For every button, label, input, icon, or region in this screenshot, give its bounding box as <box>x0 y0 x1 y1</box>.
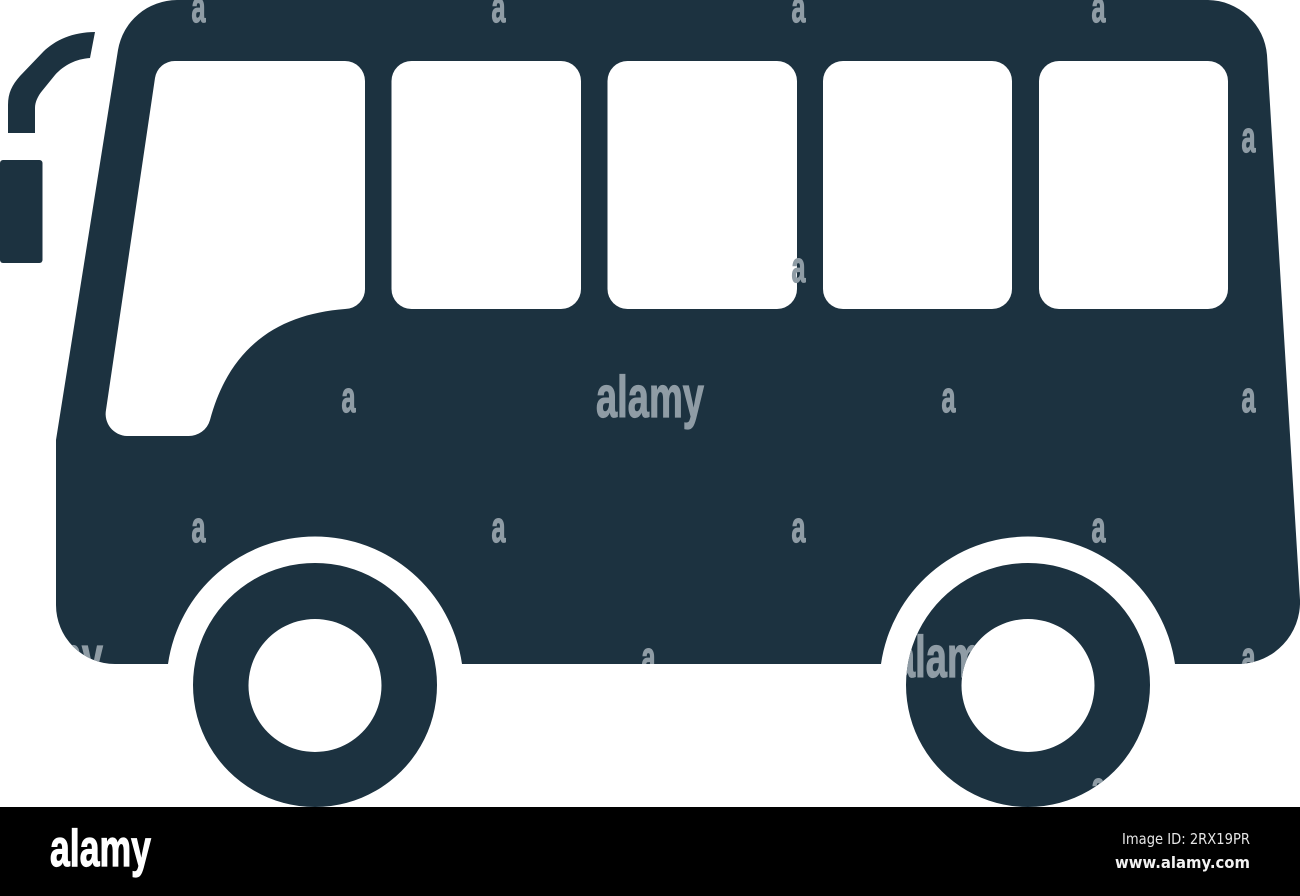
small repeating marks: a <box>1092 763 1106 812</box>
small repeating marks: a <box>1242 633 1256 682</box>
footer logo: alamy <box>50 820 151 878</box>
side windows <box>392 61 1228 309</box>
central watermark: alamy <box>596 365 704 430</box>
lower watermarks <box>72 634 975 678</box>
small repeating marks: a <box>792 243 806 292</box>
small repeating marks: a <box>942 373 956 422</box>
small repeating marks: a <box>1242 373 1256 422</box>
website: www.alamy.com <box>1115 853 1250 872</box>
mirror <box>0 160 42 263</box>
rear wheel <box>906 563 1150 807</box>
small repeating marks: a <box>342 373 356 422</box>
small repeating marks: a <box>792 503 806 552</box>
small repeating marks: a <box>1092 503 1106 552</box>
bus body with windshield cut-out <box>56 0 1300 664</box>
footer bar <box>0 807 1300 896</box>
image id: Image ID: 2RX19PR <box>1122 830 1250 848</box>
small repeating marks: a <box>642 633 656 682</box>
lower watermarks: alamy <box>894 625 1002 690</box>
front wheel <box>193 563 437 807</box>
small repeating marks: a <box>1242 113 1256 162</box>
mirror arm <box>8 32 95 133</box>
small repeating marks <box>192 0 1256 812</box>
small repeating marks: a <box>192 503 206 552</box>
small repeating marks: a <box>492 503 506 552</box>
